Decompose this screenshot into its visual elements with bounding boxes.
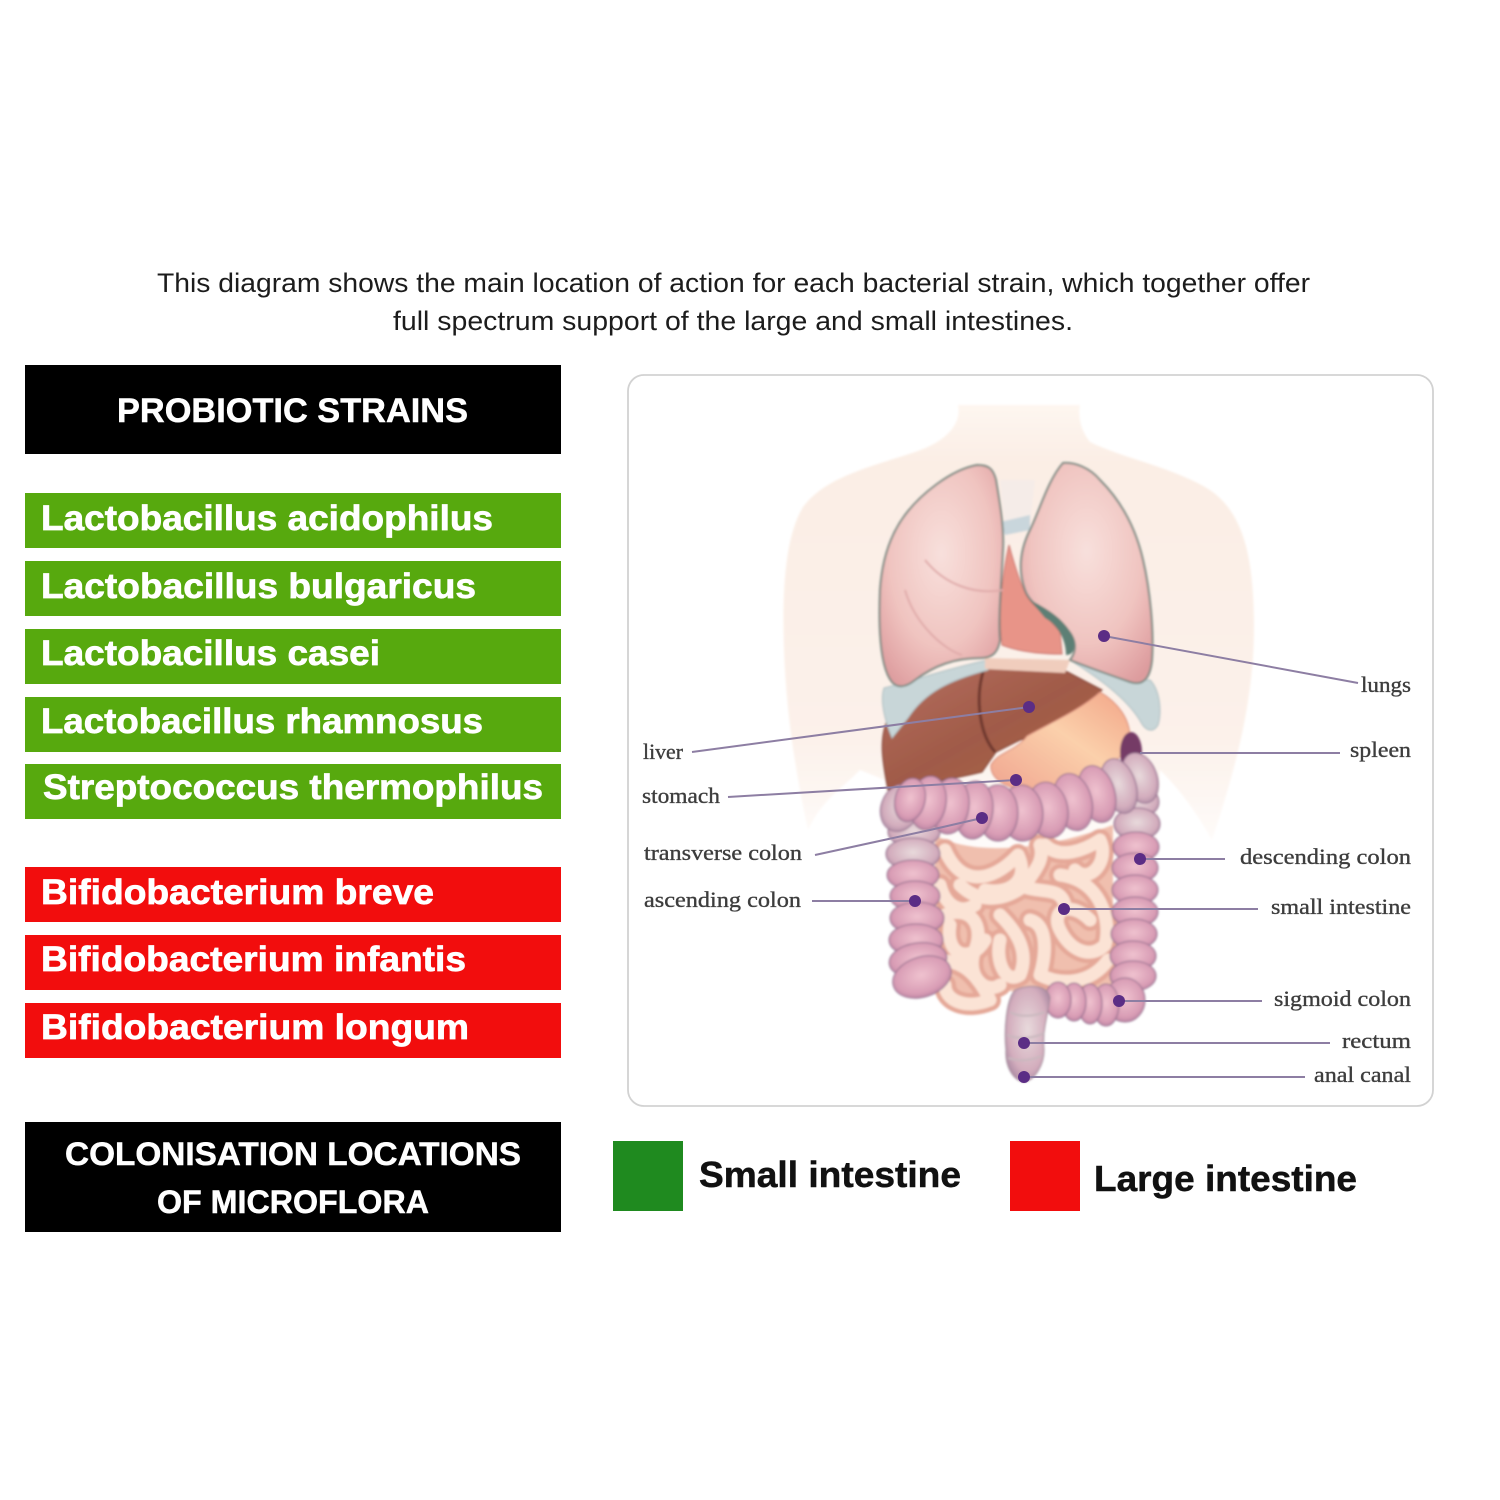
organ labels: rectum	[1342, 1028, 1411, 1053]
organ labels: small intestine	[1271, 894, 1411, 919]
trachea	[1000, 480, 1035, 525]
descending colon	[1110, 786, 1160, 991]
legend: small intestine	[613, 1141, 961, 1211]
lung: left	[880, 465, 1003, 686]
heart	[1000, 545, 1062, 654]
leader lines	[692, 636, 1358, 1077]
organ labels	[642, 672, 1411, 1087]
intro text: This diagram shows the main location of action for each bacterial strain, which together offer	[157, 268, 1310, 298]
heading: colonisation locations: OF MICROFLORA	[157, 1184, 429, 1220]
panel: anatomy diagram	[628, 375, 1433, 1106]
legend: large intestine	[1010, 1141, 1357, 1211]
body silhouette	[783, 405, 1254, 880]
strain: Lactobacillus casei	[25, 629, 561, 684]
strain: Lactobacillus bulgaricus: Lactobacillus bulgaricus	[41, 567, 476, 606]
heading: colonisation locations	[25, 1122, 561, 1232]
organ labels: spleen	[1350, 737, 1411, 762]
strain: Bifidobacterium infantis	[25, 935, 561, 990]
organ labels: sigmoid colon	[1274, 986, 1411, 1011]
heading: probiotic strains: PROBIOTIC STRAINS	[117, 392, 468, 430]
strain: Lactobacillus bulgaricus	[25, 561, 561, 616]
strain: Lactobacillus acidophilus: Lactobacillus acidophilus	[41, 499, 493, 538]
heading: colonisation locations: COLONISATION LOCATIONS	[65, 1136, 521, 1172]
spleen	[1120, 732, 1142, 772]
intro text	[157, 268, 1310, 336]
strain: Bifidobacterium breve	[25, 867, 561, 922]
organ labels: transverse colon	[644, 840, 802, 865]
legend: large intestine: Large intestine	[1094, 1158, 1357, 1199]
legend: small intestine: Small intestine	[699, 1154, 961, 1195]
strain: Streptococcus thermophilus	[25, 764, 561, 819]
organ labels: descending colon	[1240, 844, 1411, 869]
organ labels: liver	[643, 739, 684, 764]
strain: Lactobacillus acidophilus	[25, 493, 561, 548]
strain: Bifidobacterium longum: Bifidobacterium longum	[41, 1008, 469, 1047]
organ labels: anal canal	[1314, 1062, 1411, 1087]
organ labels: lungs	[1361, 672, 1411, 697]
small intestine	[935, 825, 1113, 1006]
liver	[882, 668, 1102, 790]
heading: probiotic strains	[25, 365, 561, 454]
organ labels: stomach	[642, 783, 720, 808]
panel: strains acting on small intestine	[25, 493, 561, 819]
strain: Bifidobacterium breve: Bifidobacterium breve	[41, 873, 434, 912]
marker dots	[909, 630, 1146, 1083]
organs	[874, 463, 1165, 1082]
organ labels: ascending colon	[644, 887, 801, 912]
diaphragm	[882, 660, 988, 738]
ascending colon	[886, 817, 957, 1005]
lung: right	[1021, 463, 1153, 683]
strain: Lactobacillus casei: Lactobacillus casei	[41, 634, 380, 673]
strain: Bifidobacterium infantis: Bifidobacterium infantis	[41, 940, 466, 979]
stomach	[991, 692, 1130, 791]
strain: Lactobacillus rhamnosus: Lactobacillus rhamnosus	[41, 702, 483, 741]
sigmoid colon	[1045, 978, 1145, 1026]
transverse colon	[874, 748, 1165, 842]
strain: Streptococcus thermophilus: Streptococcus thermophilus	[43, 768, 543, 807]
rectum and anal canal	[1005, 986, 1050, 1082]
intro text: full spectrum support of the large and small intestines.	[393, 306, 1073, 336]
strain: Lactobacillus rhamnosus	[25, 697, 561, 752]
panel: strains acting on large intestine	[25, 867, 561, 1058]
strain: Bifidobacterium longum	[25, 1003, 561, 1058]
